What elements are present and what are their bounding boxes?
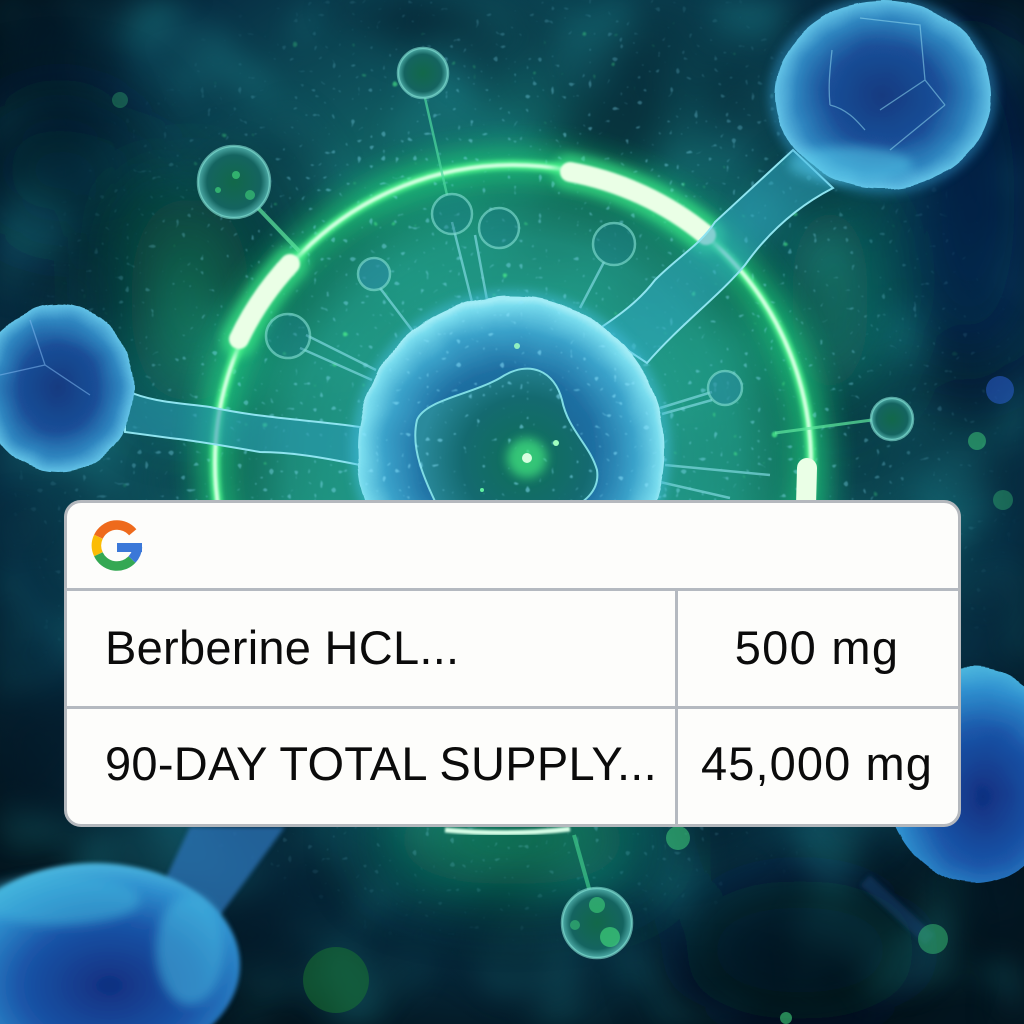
cell: left <box>0 304 134 472</box>
cell: top right <box>769 0 997 194</box>
data table card <box>64 500 961 827</box>
cell: bottom left <box>0 863 240 1024</box>
ring interior fill <box>168 118 858 808</box>
row divider 1 <box>67 588 958 591</box>
row 1 value: 500 mg <box>735 621 899 674</box>
green ring <box>215 165 811 833</box>
tube left <box>125 390 360 465</box>
tube lower left <box>165 827 285 922</box>
Google logo <box>92 520 142 571</box>
row divider 2 <box>67 706 958 709</box>
row 1 label: Berberine HCL... <box>105 621 459 674</box>
row 2 value: 45,000 mg <box>701 737 933 790</box>
tube right <box>597 150 833 363</box>
row 2 label: 90-DAY TOTAL SUPPLY... <box>105 737 657 790</box>
small vesicles <box>198 48 913 958</box>
column divider <box>675 590 678 824</box>
speckles green <box>42 0 982 850</box>
central cell <box>351 290 671 610</box>
nucleus <box>415 369 597 512</box>
stems <box>258 98 930 940</box>
ring glow <box>215 165 811 761</box>
blue bokeh <box>986 376 1014 404</box>
cell: right <box>885 667 1024 883</box>
